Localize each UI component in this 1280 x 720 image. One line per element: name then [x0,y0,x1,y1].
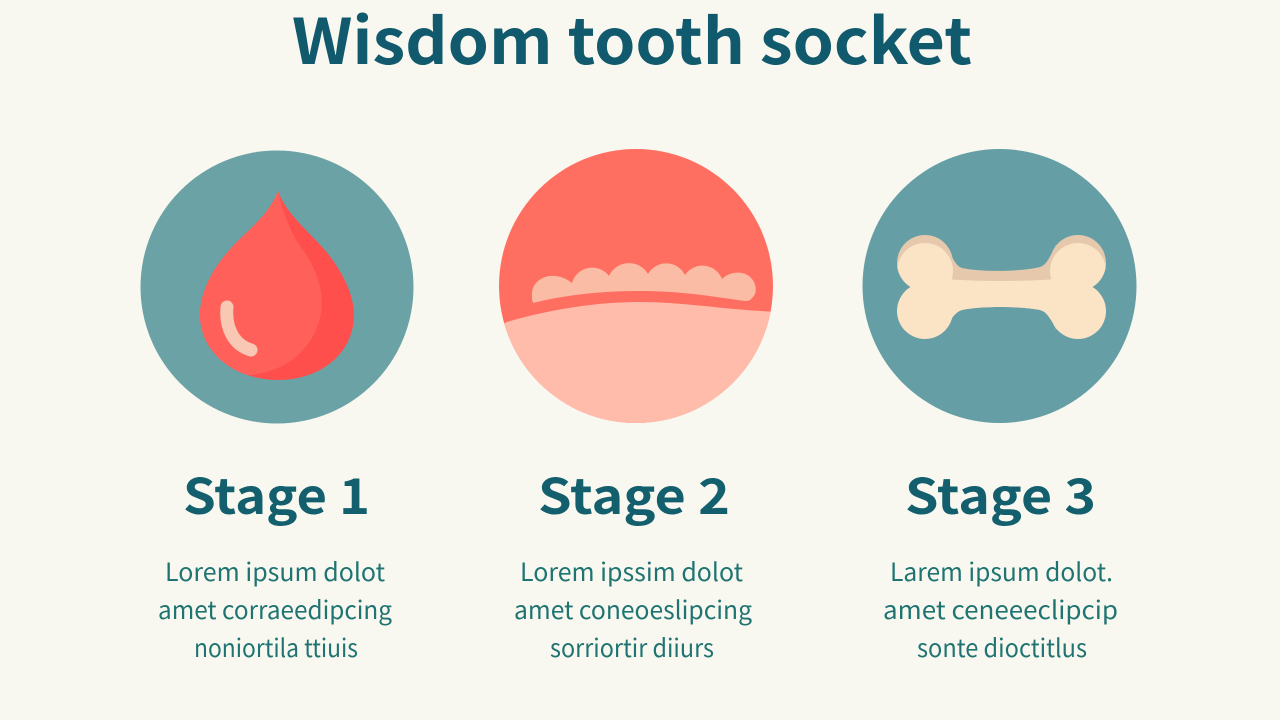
text: stage 3 description [883,553,1118,665]
text: stage 1 description [158,553,392,665]
text: stage 2 description: sorriortir diiurs [550,629,714,665]
text: stage 3 description: Larem ipsum dolot. [890,553,1113,589]
text: stage 2 description [514,553,752,665]
heading: stage 3: Stage 3 [905,458,1096,529]
text: stage 1 description: noniortila ttiuis [194,629,358,665]
heading: stage 1: Stage 1 [183,458,370,529]
panel: stage 2 [490,149,780,665]
heading: stage 2: Stage 2 [538,458,730,529]
panel: stage 3 [862,149,1136,665]
text: stage 1 description: Lorem ipsum dolot [165,553,386,589]
icon: gum tissue [490,149,780,430]
panel: stage 1 [140,150,414,665]
text: stage 2 description: Lorem ipssim dolot [520,553,744,589]
text: stage 2 description: amet coneoeslipcing [514,591,752,627]
icon: bone [862,149,1136,423]
text: stage 3 description: amet ceneeeclipcip [883,591,1118,627]
icon: blood drop [140,150,414,424]
text: stage 1 description: amet corraeedipcing [158,591,392,627]
text: stage 3 description: sonte dioctitlus [917,629,1087,665]
infographic [140,12,1136,658]
